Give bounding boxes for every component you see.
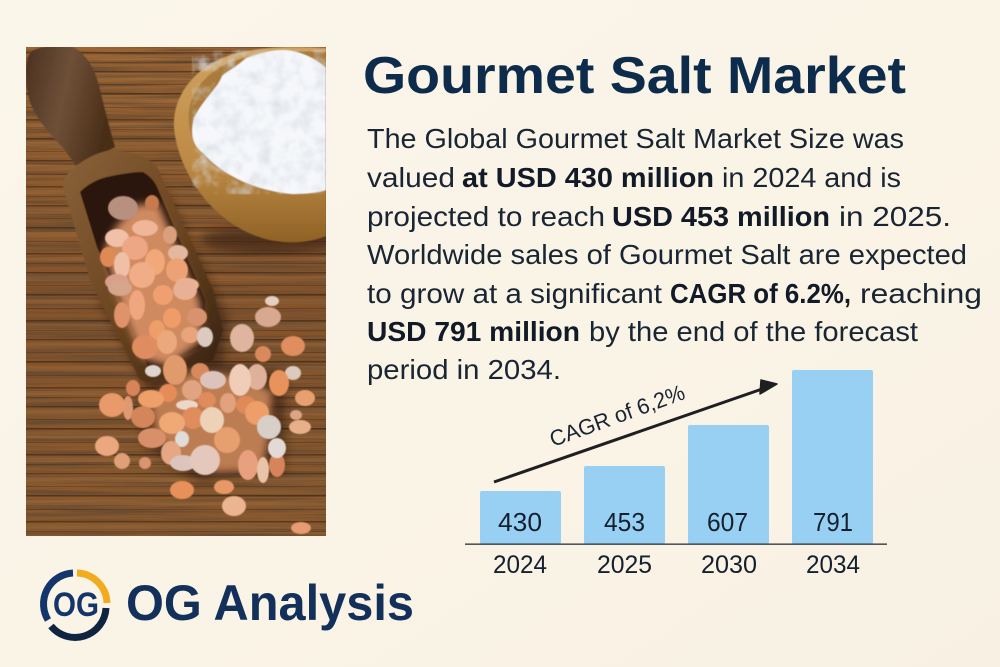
text block: market summary: USD 453 million (612, 201, 830, 232)
icon: OG ring: OG (53, 586, 99, 624)
icon: OG ring (44, 573, 107, 637)
text block: market summary: Worldwide sales of Gourmet Salt are expected (367, 239, 967, 270)
text block: market summary: to grow at a significant (367, 278, 662, 309)
pile bases under the crystals (104, 203, 272, 472)
text block: market summary: projected to reach (367, 201, 605, 232)
bar 2025: 2025 (597, 551, 652, 579)
panel: product photo of salts on wood (26, 46, 340, 536)
bar 2034 (792, 370, 873, 579)
text block: market summary: by the end of the forecast (589, 316, 918, 347)
text block: market summary: at USD 430 million (462, 162, 714, 193)
bar 2034: 2034 (806, 551, 860, 579)
text block: market summary: The Global Gourmet Salt Market Size was (367, 123, 904, 154)
text block: market summary (367, 123, 982, 385)
logo: OG Analysis (44, 573, 414, 637)
bar 2030: 2030 (701, 551, 757, 579)
bar 2030 (688, 425, 769, 579)
shadow under bowl and scoop (100, 190, 340, 482)
text block: market summary: in 2024 and is (722, 162, 901, 193)
bar 2024 (480, 491, 561, 579)
bar 2024: 430 (498, 507, 542, 537)
bar 2024: 2024 (493, 551, 547, 579)
bar chart: market size 2024 to 2034 (465, 370, 887, 579)
logo wordmark: OG Analysis (126, 575, 414, 631)
arrow: growth trend (494, 380, 777, 482)
text block: market summary: reaching (860, 278, 982, 309)
bar 2030: 607 (707, 507, 748, 537)
bar 2025 (584, 466, 665, 579)
arrow label: CAGR: CAGR of 6,2% (546, 380, 688, 452)
text block: market summary: period in 2034. (367, 354, 561, 385)
wooden table (26, 47, 326, 536)
text block: market summary: USD 791 million (367, 316, 580, 347)
text block: market summary: in 2025. (839, 201, 951, 232)
bar 2025: 453 (604, 507, 645, 537)
text block: market summary: CAGR of 6.2%, (670, 278, 851, 309)
wooden bowl with white salt (174, 47, 326, 242)
wooden scoop (26, 46, 223, 382)
pink Himalayan salt crystals (95, 195, 315, 534)
bar 2034: 791 (813, 507, 853, 537)
white salt pile (192, 50, 326, 194)
title: Gourmet Salt Market (363, 47, 906, 105)
text block: market summary: valued (367, 162, 455, 193)
